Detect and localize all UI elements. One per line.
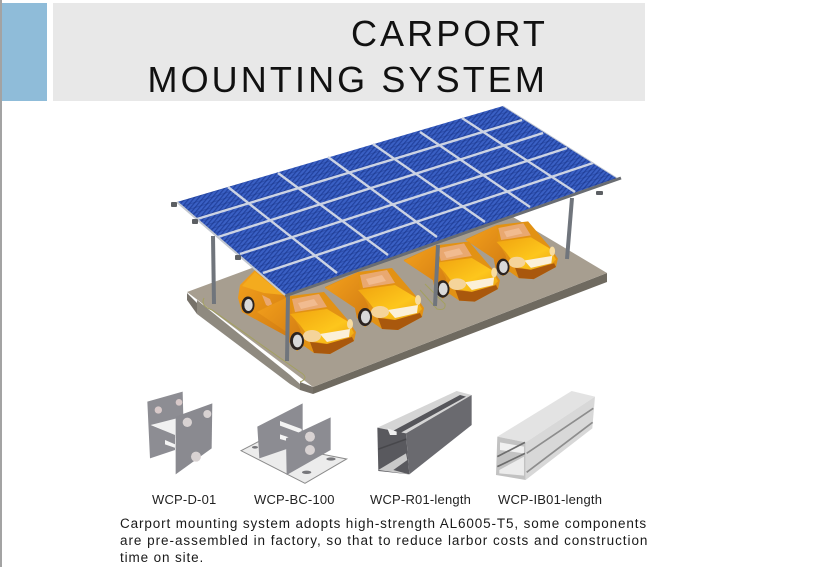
blue accent block [2,3,47,101]
rail clamps [171,191,603,260]
description text [120,516,648,565]
panel row gaps [197,118,593,273]
hardware: WCP-IB01-length rail [496,391,595,480]
label: WCP-BC-100: WCP-BC-100 [254,492,335,507]
frame rails [285,178,621,296]
car 3 [404,241,500,302]
car 1 rear body [238,270,294,337]
support posts [213,198,572,361]
description text: Carport mounting system adopts high-strength AL6005-T5, some components [120,516,647,531]
hardware: WCP-D-01 bracket [147,392,212,474]
solar panel array [171,106,621,296]
label: WCP-IB01-length: WCP-IB01-length [498,492,602,507]
concrete ground slab [187,189,607,394]
description text: are pre-assembled in factory, so that to reduce larbor costs and construction [120,533,648,548]
hardware: WCP-BC-100 bracket [241,403,347,483]
label: WCP-D-01: WCP-D-01 [152,492,216,507]
car 2 [325,268,424,330]
car 1 [238,270,356,354]
description text: time on site. [120,550,204,565]
title banner [53,3,645,101]
hardware: WCP-R01-length rail [377,391,472,474]
title line: carport: CARPORT [351,13,548,54]
left page edge [0,0,2,567]
label: WCP-R01-length: WCP-R01-length [370,492,471,507]
car 4 [466,221,558,279]
title line: mounting system: MOUNTING SYSTEM [147,59,548,100]
